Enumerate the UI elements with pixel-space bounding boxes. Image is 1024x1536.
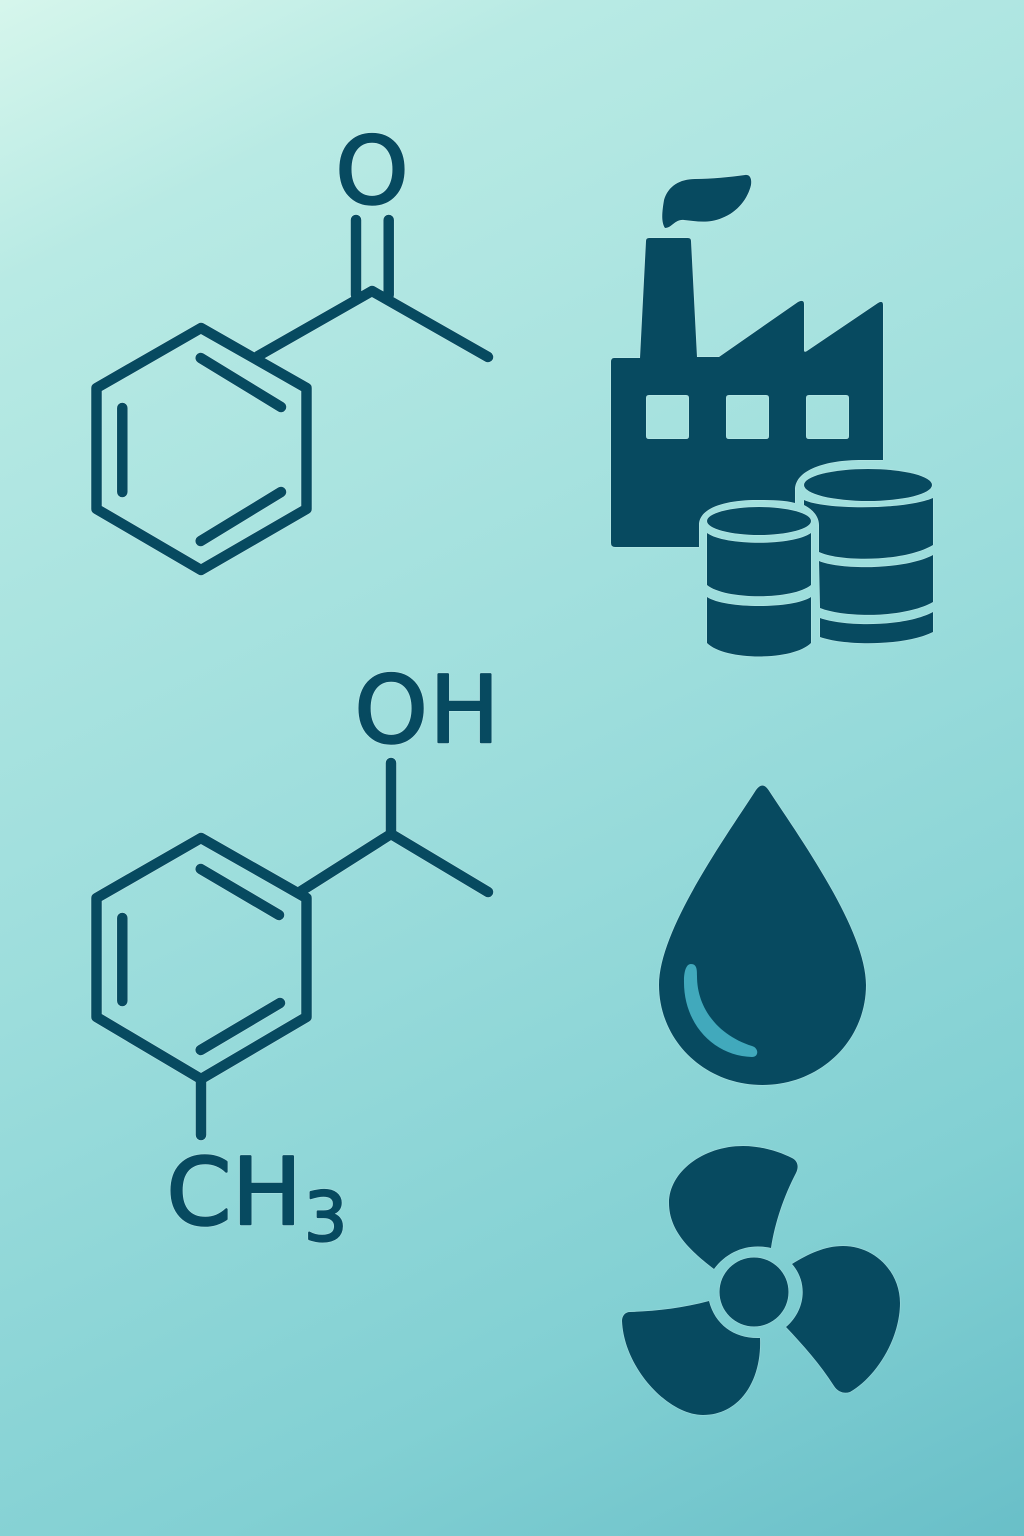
blade: bottom left bbox=[622, 1301, 760, 1415]
methyl label: CH bbox=[166, 1138, 302, 1246]
smoke bbox=[662, 175, 751, 228]
icon: propeller fan bbox=[622, 1146, 900, 1415]
molecule: methylphenyl ethanol bbox=[96, 656, 499, 1258]
benzene ring bbox=[96, 328, 306, 570]
side chain bonds bbox=[201, 763, 488, 1135]
drop highlight bbox=[684, 964, 757, 1057]
methyl subscript: 3 bbox=[304, 1178, 347, 1258]
icon: factory with barrels bbox=[611, 175, 933, 656]
factory building bbox=[611, 238, 883, 547]
carbonyl and methyl bonds bbox=[258, 220, 488, 357]
oxygen label: O bbox=[335, 117, 409, 225]
blade: right bbox=[786, 1246, 900, 1393]
hydroxyl label: OH bbox=[354, 656, 499, 764]
hub bbox=[720, 1258, 788, 1326]
benzene ring bbox=[96, 838, 306, 1079]
icon: oil drop bbox=[659, 786, 866, 1085]
molecule: acetophenone bbox=[96, 117, 488, 570]
barrel: right bbox=[804, 469, 933, 643]
barrel: left bbox=[707, 507, 811, 656]
blade: top bbox=[669, 1146, 798, 1269]
